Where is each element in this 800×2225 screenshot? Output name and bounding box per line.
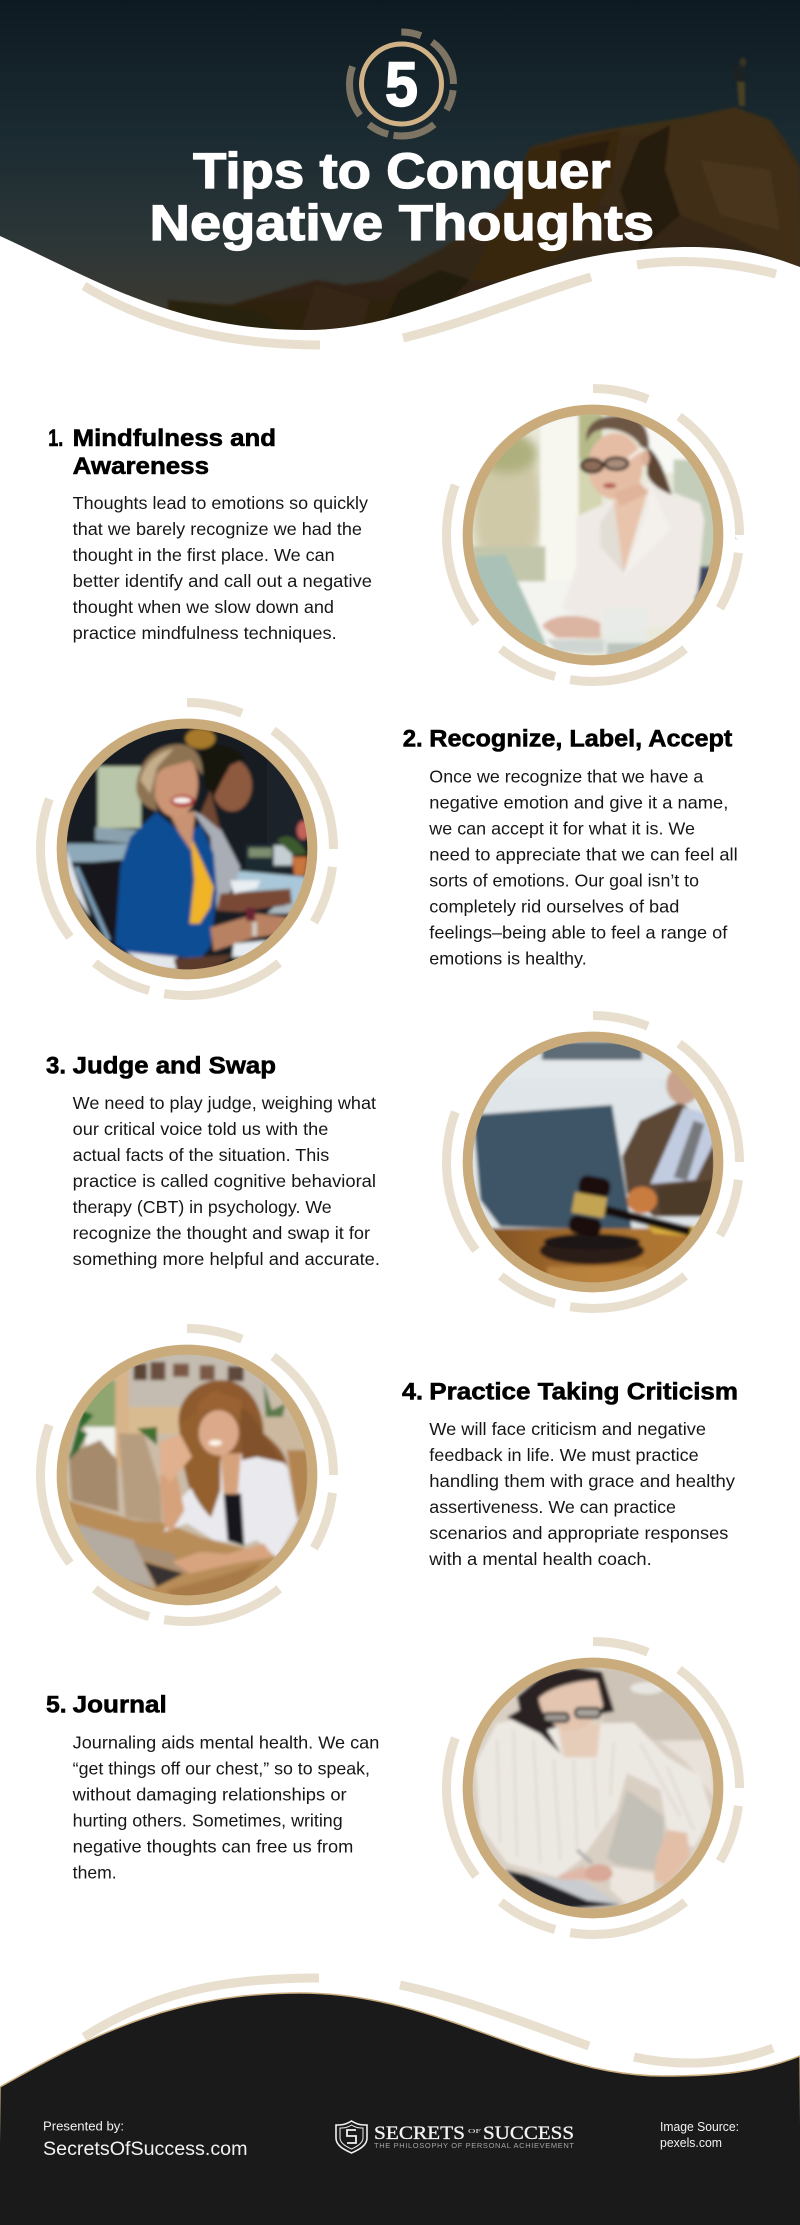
body: tip 2: completely rid ourselves of bad — [429, 896, 679, 916]
panel: tip 5 text — [46, 1691, 379, 1882]
panel: tip 5 photo, woman writing in journal — [446, 1642, 740, 1934]
body: tip 4: We will face criticism and negative — [429, 1419, 706, 1439]
body: tip 4: handling them with grace and healthy — [429, 1471, 735, 1491]
heading: tip 5: 5. — [46, 1691, 67, 1718]
body: tip 3 — [73, 1093, 380, 1269]
body: tip 2: sorts of emotions. Our goal isn’t to — [429, 870, 699, 890]
body: tip 3: We need to play judge, weighing what — [73, 1093, 376, 1113]
panel: tip 1 text — [48, 425, 372, 643]
body: tip 1: thought in the first place. We can — [73, 545, 335, 565]
heading: tip 3: 3. — [46, 1052, 66, 1079]
badge number 5 — [350, 32, 454, 136]
body: tip 2: Once we recognize that we have a — [429, 766, 704, 786]
body: tip 4: scenarios and appropriate responses — [429, 1523, 729, 1543]
body: tip 3: recognize the thought and swap it for — [73, 1223, 370, 1243]
header — [0, 0, 800, 400]
image source: Image Source: — [660, 2119, 739, 2134]
heading: tip 2: Recognize, Label, Accept — [429, 726, 732, 753]
white wave divider — [0, 236, 800, 400]
icon: shield — [336, 2121, 367, 2153]
heading: tip 1 — [48, 425, 276, 480]
body: tip 1: practice mindfulness techniques. — [73, 623, 337, 643]
footer dark wave panel — [0, 1993, 800, 2225]
body: tip 1: that we barely recognize we had the — [73, 519, 362, 539]
panel: tip 3 photo, gavel and laptop — [446, 1016, 740, 1308]
body: tip 4: feedback in life. We must practice — [429, 1445, 699, 1465]
image source: pexels.com — [660, 2135, 722, 2150]
heading: tip 1: Mindfulness and — [73, 425, 276, 452]
panel: tip 2 photo, smiling woman in blue blazer — [40, 702, 334, 996]
body: tip 2: feelings–being able to feel a range of — [429, 922, 727, 942]
heading: tip 1: Awareness — [73, 453, 209, 480]
body: tip 4: assertiveness. We can practice — [429, 1497, 676, 1517]
body: tip 3: practice is called cognitive behavioral — [73, 1171, 376, 1191]
body: tip 4: with a mental health coach. — [428, 1549, 652, 1569]
badge number 5: 5 — [385, 50, 418, 120]
body: tip 5: negative thoughts can free us from — [73, 1836, 353, 1856]
body: tip 3: actual facts of the situation. This — [73, 1145, 330, 1165]
heading: tip 1: 1. — [48, 425, 63, 452]
body: tip 1: thought when we slow down and — [73, 597, 334, 617]
body: tip 5: them. — [73, 1862, 117, 1882]
wordmark: SECRETS — [374, 2123, 465, 2144]
body: tip 3: therapy (CBT) in psychology. We — [73, 1197, 332, 1217]
heading: tip 5: Journal — [73, 1691, 167, 1718]
body: tip 3: something more helpful and accurate. — [73, 1249, 380, 1269]
title: Tips to Conquer — [193, 143, 611, 199]
body: tip 5: Journaling aids mental health. We can — [73, 1732, 379, 1752]
body: tip 5 — [72, 1732, 379, 1882]
heading: tip 4: Practice Taking Criticism — [429, 1378, 738, 1405]
body: tip 4 — [428, 1419, 735, 1569]
panel: tip 4 photo, woman waving on a video call — [40, 1328, 334, 1622]
image source — [660, 2119, 739, 2150]
body: tip 5: hurting others. Sometimes, writing — [73, 1810, 343, 1830]
body: tip 2: we can accept it for what it is. We — [428, 818, 695, 838]
body: tip 5: without damaging relationships or — [72, 1784, 347, 1804]
body: tip 5: “get things off our chest,” so to speak, — [73, 1758, 370, 1778]
body: tip 2 — [428, 766, 738, 968]
logo: Secrets of Success — [336, 2121, 574, 2153]
heading: tip 4: 4. — [402, 1378, 423, 1405]
panel: tip 3 text — [46, 1052, 380, 1269]
panel: tip 4 text — [402, 1378, 738, 1569]
title: Negative Thoughts — [150, 195, 654, 251]
wordmark: SUCCESS — [483, 2123, 574, 2144]
panel: tip 1 photo, woman at laptop — [446, 388, 740, 682]
body: tip 3: our critical voice told us with the — [73, 1119, 328, 1139]
body: tip 1: better identify and call out a negative — [73, 571, 372, 591]
body: tip 1 — [73, 493, 372, 643]
presented by: SecretsOfSuccess.com — [43, 2138, 248, 2160]
header photo: mountain at dusk — [0, 0, 800, 345]
heading: tip 2: 2. — [403, 726, 423, 753]
body: tip 2: emotions is healthy. — [429, 948, 587, 968]
footer wave accent strokes — [84, 1978, 773, 2063]
wave accent strokes — [84, 262, 776, 345]
tagline: THE PHILOSOPHY OF PERSONAL ACHIEVEMENT — [374, 2141, 574, 2150]
body: tip 2: need to appreciate that we can feel all — [429, 844, 738, 864]
heading: tip 3: Judge and Swap — [73, 1052, 276, 1079]
presented by — [43, 2119, 248, 2160]
title — [150, 143, 654, 251]
wordmark — [374, 2123, 574, 2144]
body: tip 2: negative emotion and give it a name, — [429, 792, 728, 812]
panel: tip 2 text — [403, 726, 738, 968]
footer — [0, 1978, 800, 2225]
climber figure — [733, 58, 746, 106]
presented by: Presented by: — [43, 2119, 124, 2134]
body: tip 1: Thoughts lead to emotions so quickly — [73, 493, 368, 513]
wordmark: OF — [468, 2128, 482, 2135]
